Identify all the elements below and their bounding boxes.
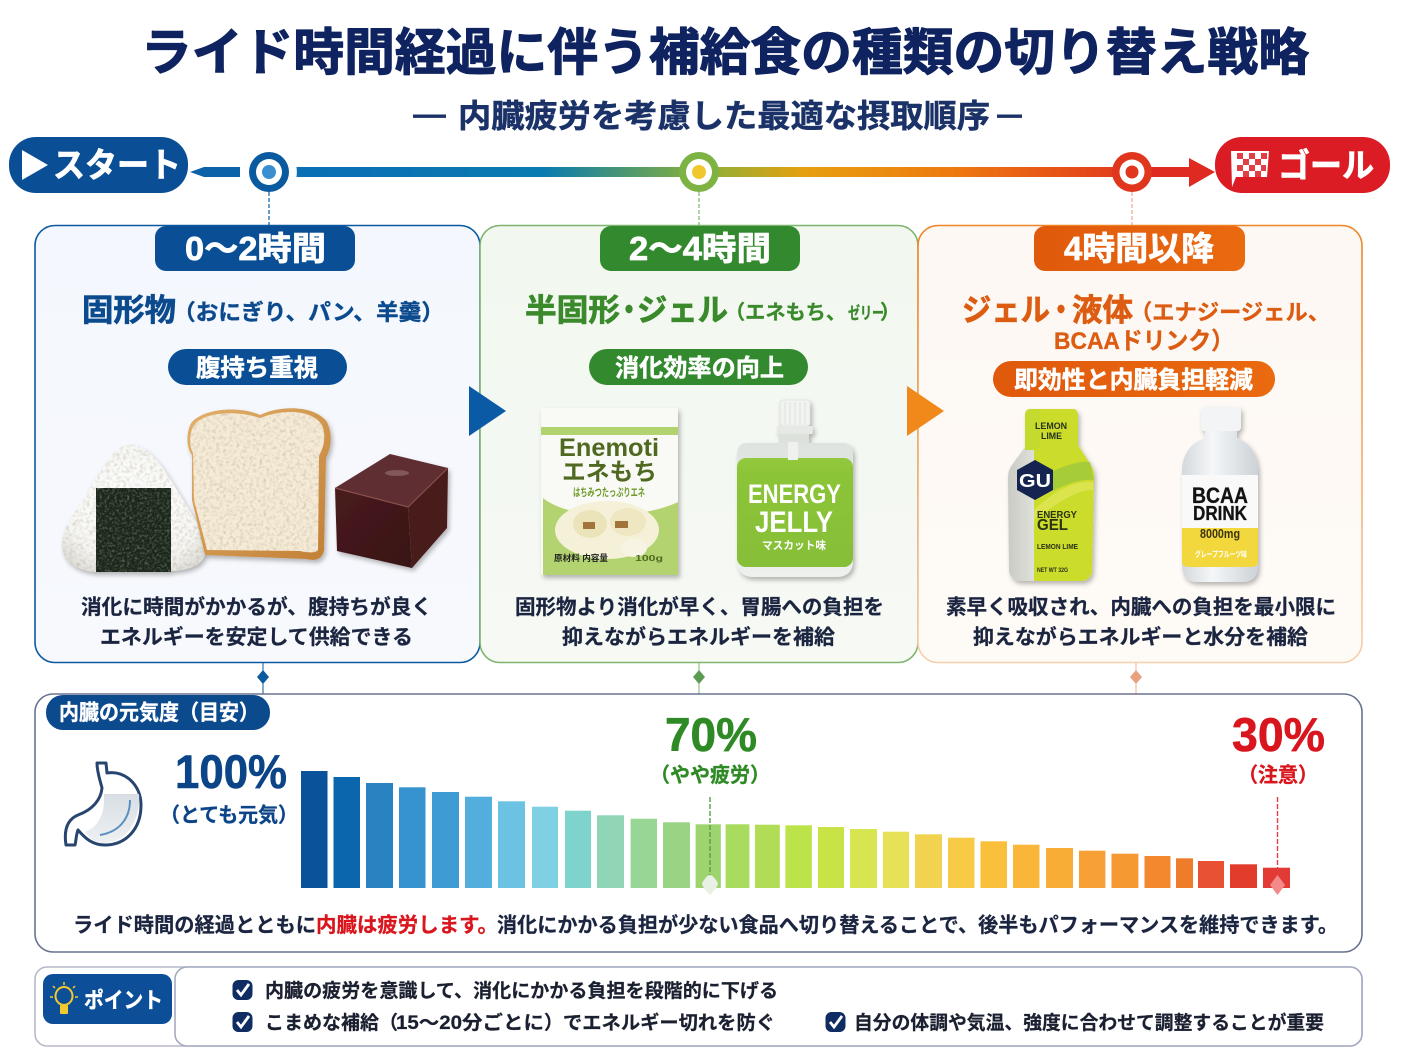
heading: solid food: （おにぎり、パン、羊羹）: [173, 300, 444, 325]
description: [81, 595, 432, 649]
illustration: enemochi pack: Enemoti: [559, 434, 659, 462]
sub pill: immediate effect: [993, 361, 1275, 397]
start badge: スタート: [53, 147, 181, 185]
connector diamond 1: [257, 670, 269, 684]
meter summary sentence: [73, 913, 1338, 937]
heading: gel and liquid: [962, 293, 1330, 355]
sub pill: digestion: [589, 349, 808, 385]
milestone 1: [241, 144, 297, 200]
heading: gel and liquid: ジェル: [962, 293, 1050, 328]
stat: 30%: （注意）: [1238, 764, 1318, 787]
meter label: 内臓の元気度（目安）: [59, 701, 259, 725]
description: 素早く吸収され、内臓への負担を最小限に: [946, 596, 1336, 619]
sub pill: digestion: 消化効率の向上: [615, 355, 784, 382]
sub pill: stomach filling: 腹持ち重視: [196, 355, 318, 382]
point 2: 15〜20分ごとに: [396, 1011, 544, 1034]
illustration: energy gel: NET WT 32G: [1037, 568, 1068, 574]
timeline gradient line: [296, 167, 1116, 177]
stat: 70%: （やや疲労）: [650, 764, 770, 787]
timeline: [9, 137, 1390, 200]
illustration: BCAA bottle: DRINK: [1193, 503, 1247, 525]
illustration: energy gel: LEMON: [1035, 421, 1067, 432]
stat: 70%: [650, 708, 770, 787]
stat: 30%: 30%: [1232, 708, 1325, 761]
arrow: phase 2 to 3: [907, 386, 944, 436]
illustration: BCAA bottle: [1182, 407, 1258, 582]
connector diamond 3: [1130, 670, 1142, 684]
illustration: BCAA bottle: 8000mg: [1200, 526, 1240, 541]
time pill 0-2: [155, 226, 355, 271]
sub pill: stomach filling: [168, 349, 347, 385]
time pill 0-2: 0〜2時間: [185, 230, 326, 267]
illustration: energy gel: LEMON LIME: [1037, 542, 1078, 551]
panel: after 4 hours: [918, 226, 1362, 662]
illustration: energy gel: [1008, 409, 1094, 581]
point 2: （: [379, 1012, 398, 1034]
description: 抑えながらエネルギーを補給: [562, 625, 836, 649]
description: [946, 596, 1336, 649]
illustration: enemochi pack: はちみつたっぷりエネ: [573, 486, 645, 499]
time pill 2-4: 2〜4時間: [629, 230, 771, 267]
heading: gel and liquid: 液体: [1072, 293, 1133, 328]
meter label: [46, 695, 270, 730]
illustration: energy gel: GU: [1019, 471, 1051, 491]
connector diamond 2: [693, 670, 705, 684]
panel: key points: [35, 967, 1362, 1046]
time pill 4h+: [1034, 226, 1245, 271]
heading: semi-solid: 半固形: [525, 293, 620, 328]
heading: solid food: [82, 293, 444, 328]
panel: organ energy meter: [35, 694, 1362, 952]
icon: light bulb: [50, 982, 78, 1014]
timeline arrow to goal: [1150, 158, 1215, 187]
heading: solid food: 固形物: [82, 293, 176, 328]
icon: stomach: [65, 763, 141, 845]
heading: semi-solid: （エネもち、: [725, 301, 846, 324]
panel: 0-2 hours: [35, 226, 480, 662]
milestone 3: [1112, 152, 1152, 192]
illustration: enemochi pack: 原材料 内容量: [554, 553, 608, 563]
illustration: BCAA bottle: BCAA: [1192, 483, 1248, 508]
illustration: bread: [188, 408, 331, 560]
illustration: enemochi pack: 100g: [635, 553, 663, 563]
stat: 100%: （とても元気）: [160, 804, 298, 827]
marker 30%: [1270, 797, 1285, 895]
arrow: phase 1 to 2: [469, 386, 506, 436]
illustration: enemochi pack: [541, 408, 678, 575]
description: エネルギーを安定して供給できる: [100, 626, 413, 649]
subtitle: 内臓疲労を考慮した最適な摂取順序: [458, 98, 990, 134]
description: 消化に時間がかかるが、腹持ちが良く: [81, 595, 432, 619]
illustration: energy jelly pouch: JELLY: [755, 506, 833, 539]
heading: semi-solid: ）: [880, 301, 900, 324]
point 2: こまめな補給: [265, 1012, 379, 1034]
heading: gel and liquid: BCAAドリンク）: [1054, 328, 1234, 355]
illustration: energy gel: ENERGY: [1037, 510, 1077, 521]
illustration: yokan: [335, 454, 448, 568]
stat: 100%: [160, 745, 298, 827]
description: [515, 595, 884, 649]
title: ライド時間経過に伴う補給食の種類の切り替え戦略: [141, 24, 1310, 81]
point 3: 自分の体調や気温、強度に合わせて調整することが重要: [854, 1011, 1324, 1034]
description: 抑えながらエネルギーと水分を補給: [973, 625, 1309, 649]
heading: semi-solid: ゼリー: [848, 303, 884, 323]
sub pill: immediate effect: 即効性と内臓負担軽減: [1014, 367, 1253, 394]
heading: gel and liquid: （エナジージェル、: [1130, 300, 1330, 325]
start badge: [9, 137, 188, 193]
point 2: [232, 1011, 775, 1034]
point badge: ポイント: [84, 988, 163, 1013]
illustration: energy jelly pouch: マスカット味: [762, 538, 826, 552]
marker 70%: [702, 797, 718, 895]
heading: semi-solid: ジェル: [637, 293, 728, 328]
goal badge: [1215, 137, 1390, 193]
time pill 2-4: [600, 226, 800, 271]
bar chart: [301, 771, 1290, 888]
heading: gel and liquid: ・: [1048, 293, 1074, 328]
illustration: energy jelly pouch: ENERGY: [748, 479, 841, 509]
panel: 2-4 hours: [480, 226, 918, 662]
heading: semi-solid: [525, 293, 900, 328]
stat: 30%: [1232, 708, 1325, 787]
meter summary sentence: 内臓は疲労します。: [316, 914, 498, 937]
illustration: energy gel: LIME: [1041, 431, 1062, 442]
illustration: BCAA bottle: グレープフルーツ味: [1195, 549, 1247, 559]
stat: 100%: 100%: [175, 745, 287, 798]
illustration: energy jelly pouch: [737, 400, 853, 577]
stat: 70%: 70%: [665, 708, 757, 761]
illustration: energy gel: GEL: [1037, 517, 1068, 534]
goal badge: ゴール: [1278, 147, 1374, 184]
meter summary sentence: ライド時間の経過とともに: [73, 914, 316, 937]
point 2: でエネルギー切れを防ぐ: [563, 1012, 775, 1034]
heading: semi-solid: ・: [616, 293, 642, 328]
illustration: onigiri: [62, 445, 206, 572]
point 1: 内臓の疲労を意識して、消化にかかる負担を段階的に下げる: [265, 979, 778, 1002]
point 2: ）: [544, 1012, 563, 1034]
description: 固形物より消化が早く、胃腸への負担を: [515, 595, 884, 619]
milestone 2: [679, 152, 719, 192]
point badge: [43, 974, 172, 1024]
illustration: enemochi pack: エネもち: [562, 459, 657, 486]
timeline line left stub: [190, 167, 240, 177]
time pill 4h+: 4時間以降: [1064, 230, 1214, 267]
meter summary sentence: 消化にかかる負担が少ない食品へ切り替えることで、後半もパフォーマンスを維持できます。: [497, 913, 1338, 937]
